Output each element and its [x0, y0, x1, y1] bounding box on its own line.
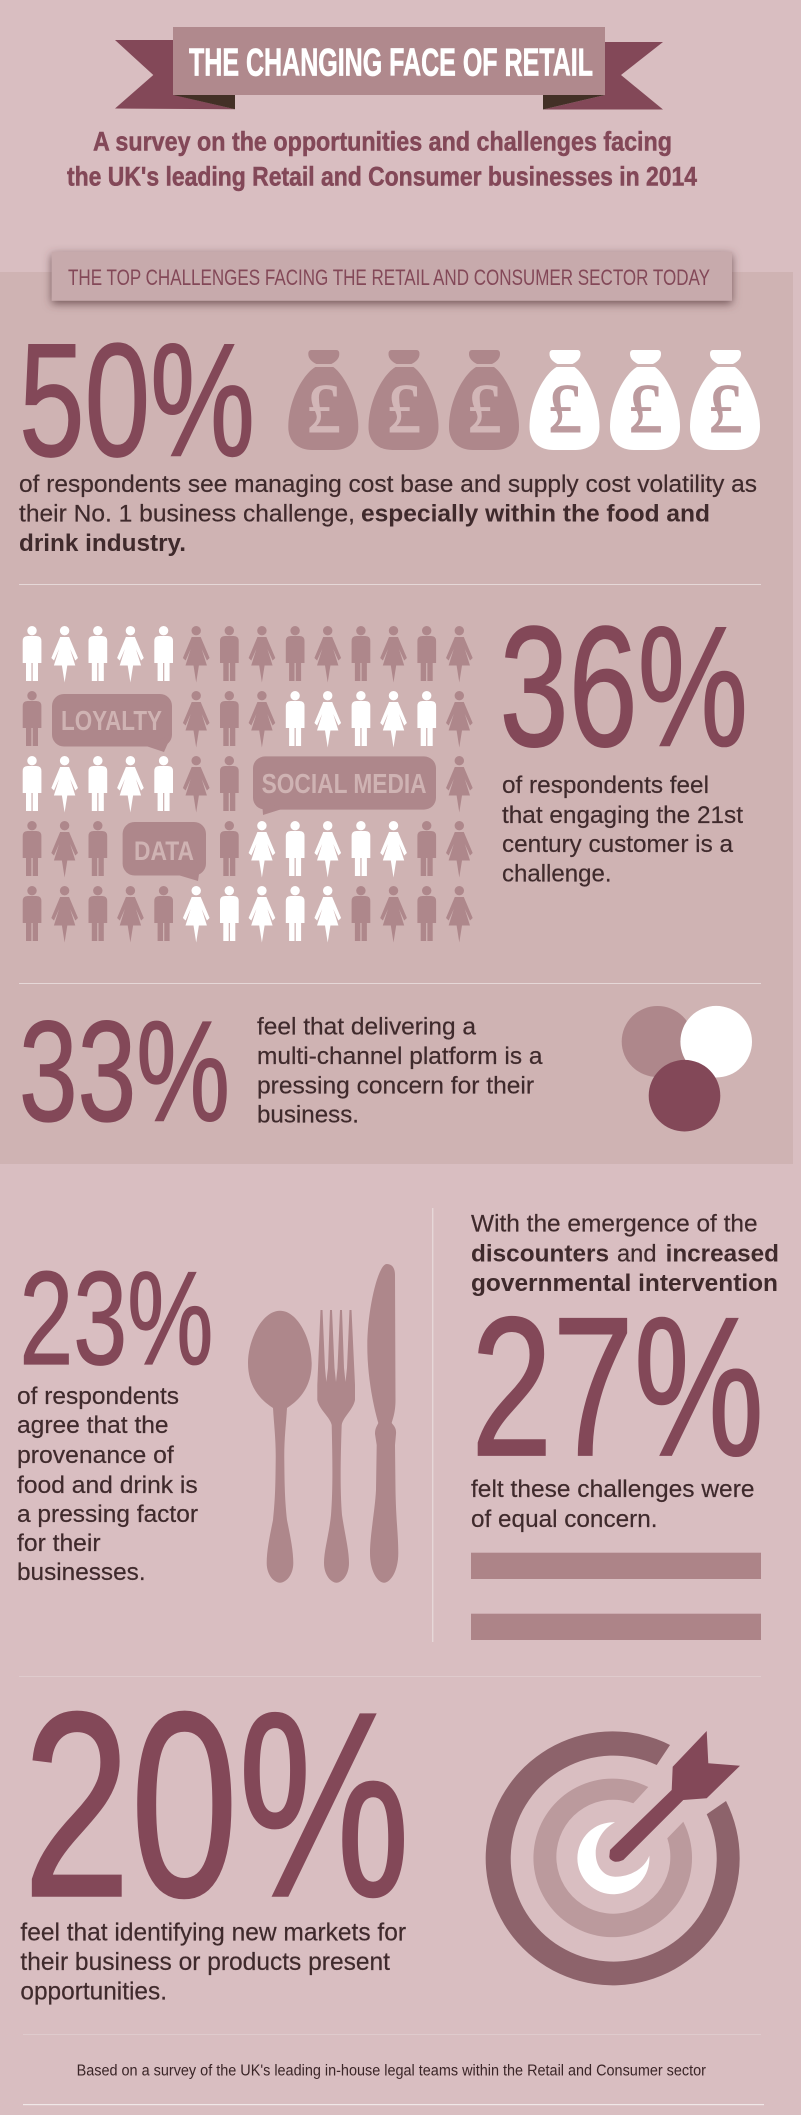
text: 33% description: pressing concern for their [257, 1073, 534, 1100]
speech bubble: social media [253, 756, 436, 815]
inner white crescent [577, 1822, 649, 1894]
text: 50% description: drink industry. [19, 530, 186, 557]
text: 23% description: of respondents [17, 1383, 179, 1410]
text: 27% intro: discounters [471, 1241, 609, 1268]
text: 27% intro: With the emergence of the [471, 1211, 758, 1238]
arrow [609, 1731, 740, 1862]
icon: equals bars [471, 1553, 761, 1640]
ribbon right tail [543, 42, 663, 110]
icon: money bags: £ [547, 371, 582, 448]
subtitle: A survey on the opportunities and challenges facing [93, 126, 672, 156]
text: 20% description: opportunities. [20, 1977, 167, 2005]
text: 23% description: for their [17, 1530, 101, 1557]
footer note: Based on a survey of the UK's leading in-house legal teams within the Retail and Consumer sector [77, 2063, 706, 2080]
ribbon left tail [115, 40, 235, 109]
text: 50% description: especially within the food and [361, 500, 710, 528]
text: 27% intro: and [617, 1241, 656, 1268]
fork [317, 1310, 355, 1583]
icon: money bags [288, 350, 760, 450]
subtitle [67, 126, 697, 192]
text: 36% description: challenge. [502, 861, 612, 888]
title banner [115, 27, 663, 110]
text: 27% description [471, 1476, 754, 1533]
panel: top challenges background [0, 272, 793, 1164]
icon: money bags: £ [386, 371, 421, 448]
speech bubble: loyalty [52, 694, 172, 752]
text: 23% description [17, 1383, 198, 1586]
icon: cutlery [248, 1264, 398, 1583]
text: 27% description: of equal concern. [471, 1506, 658, 1533]
text: 27% intro [471, 1211, 779, 1297]
text: 23% description: provenance of [17, 1442, 174, 1469]
text: 33% description [257, 1014, 543, 1129]
text: 36% description: century customer is a [502, 831, 734, 858]
outer ring [486, 1731, 740, 1985]
text: 20% description: their business or products present [20, 1948, 390, 1976]
text: 33% description: multi-channel platform is a [257, 1043, 543, 1070]
text: 33% description: business. [257, 1102, 359, 1129]
text: 23% description: food and drink is [17, 1472, 198, 1499]
stat: 50%: 50% [19, 310, 255, 490]
ribbon right fold [543, 95, 605, 110]
ribbon left fold [173, 95, 235, 109]
text: 33% description: feel that delivering a [257, 1014, 477, 1041]
knife [367, 1264, 398, 1583]
icon: money bags: £ [708, 371, 742, 448]
section header bar [52, 252, 732, 301]
title text: THE CHANGING FACE OF RETAIL [189, 42, 593, 84]
stat: 33%: 33% [19, 992, 230, 1152]
text: 27% intro: increased [666, 1241, 779, 1268]
text: 23% description: businesses. [17, 1559, 146, 1586]
text: 36% description: that engaging the 21st [502, 802, 743, 829]
icon: target with arrow [486, 1731, 740, 1985]
text: 27% description: felt these challenges were [471, 1476, 754, 1503]
text: 50% description: their No. 1 business challenge, [19, 500, 355, 528]
icon: money bags: £ [628, 371, 662, 448]
speech bubble: data [123, 822, 206, 881]
spoon [248, 1311, 312, 1583]
icon: three overlapping circles [622, 1006, 752, 1131]
text: 20% description: feel that identifying new markets for [20, 1919, 406, 1947]
text: 23% description: a pressing factor [17, 1501, 198, 1528]
text: 20% description [20, 1919, 406, 2005]
text: 36% description [502, 772, 743, 888]
ribbon centre [173, 27, 605, 95]
text: 27% intro: governmental intervention [471, 1270, 778, 1297]
speech bubble: social media: SOCIAL MEDIA [262, 768, 427, 799]
middle ring [533, 1779, 692, 1937]
icon: money bags: £ [466, 371, 502, 448]
stat: 23%: 23% [19, 1245, 213, 1393]
text: 36% description: of respondents feel [502, 772, 709, 799]
text: 50% description: of respondents see managing cost base and supply cost volatility as [19, 471, 757, 498]
subtitle: the UK's leading Retail and Consumer businesses in 2014 [67, 162, 697, 192]
speech bubble: loyalty: LOYALTY [61, 705, 162, 736]
icon: money bags: £ [306, 371, 341, 448]
speech bubble: data: DATA [134, 836, 194, 866]
people grid [23, 626, 473, 942]
stat: 20%: 20% [23, 1658, 410, 1952]
text: 23% description: agree that the [17, 1412, 169, 1439]
text: 50% description [19, 471, 757, 557]
